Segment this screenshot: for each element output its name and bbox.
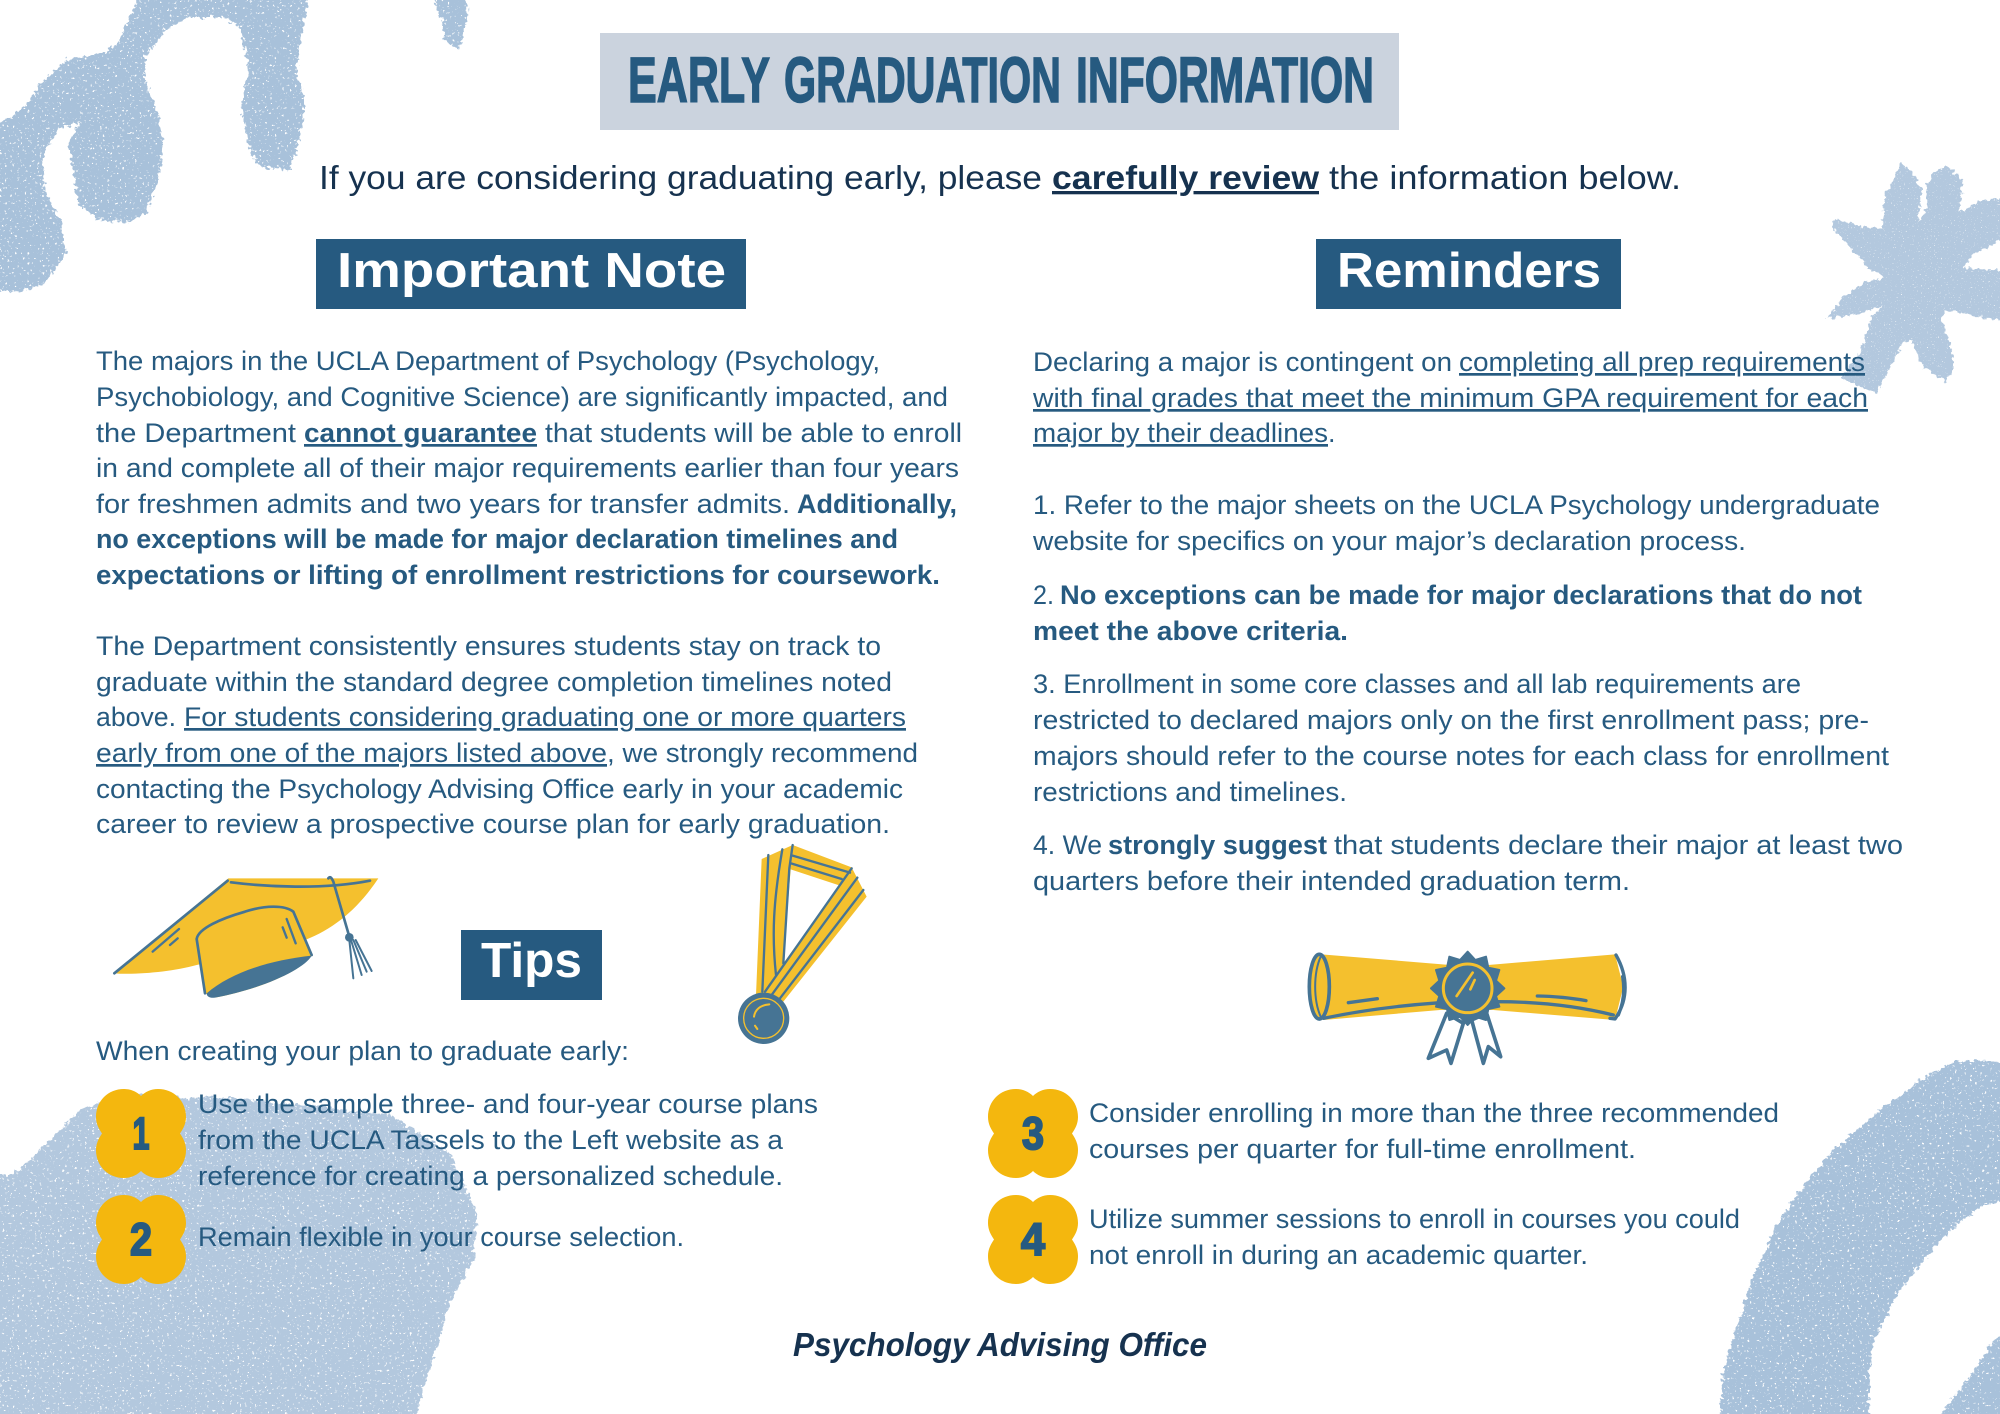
text: step 1: Use the sample three- and four-year course plans [198,1089,818,1119]
badge: step 3 [988,1089,1078,1178]
heading: Tips [461,930,602,1000]
text block: important note paragraph 2: early from one of the majors listed above [96,738,607,768]
text: tips intro: When creating your plan to graduate early: [96,1036,629,1066]
text block: reminder 2: No exceptions can be made for major declarations that do not [1060,580,1862,610]
badge: step 1: 1 [132,1108,150,1159]
heading: Important Note: Important Note [337,244,726,298]
text block: important note paragraph 2: For students considering graduating one or more quarters [184,702,906,732]
text block: reminder 3: 3. Enrollment in some core classes and all lab requirements are [1033,669,1801,699]
intro sentence [319,159,1681,196]
text: step 1: from the UCLA Tassels to the Left website as a [198,1125,784,1155]
text block: important note paragraph 1: the Department [96,418,297,448]
badge: step 1 [96,1089,186,1178]
text block: important note paragraph 1: in and complete all of their major requirements earlier than four years [96,453,959,483]
intro sentence: If you are considering graduating early, please [319,159,1042,196]
heading: Important Note [316,239,746,309]
heading: Reminders: Reminders [1337,244,1601,298]
text: step 3 [1089,1098,1779,1164]
icon: graduation cap [113,877,378,998]
text block: reminder 3 [1033,669,1890,807]
badge: step 2: 2 [130,1214,152,1265]
heading: Tips: Tips [481,934,582,988]
text block: reminder 1 [1032,490,1880,556]
heading: Reminders [1316,239,1621,309]
text block: important note paragraph 1 [96,346,962,590]
text block: reminder 3: majors should refer to the course notes for each class for enrollment [1033,741,1890,771]
badge: step 4 [988,1195,1078,1284]
intro sentence: the information below. [1329,159,1681,196]
text block: reminder 3: restricted to declared majors only on the first enrollment pass; pre- [1033,705,1869,735]
text block: reminders declaration note: . [1328,418,1336,448]
badge: step 3: 3 [1022,1108,1044,1159]
text block: important note paragraph 2: career to review a prospective course plan for early graduation. [96,809,890,839]
badge: step 2 [96,1195,186,1284]
icon: medal [738,845,867,1044]
text block: important note paragraph 1: Psychobiology, and Cognitive Science) are significantly impacted, and [96,382,948,412]
text: step 4: not enroll in during an academic quarter. [1089,1240,1588,1270]
text: step 4: Utilize summer sessions to enroll in courses you could [1089,1204,1740,1234]
text block: important note paragraph 2: , we strongly recommend [607,738,918,768]
title banner: EARLY [628,44,770,116]
text: step 1 [198,1089,818,1191]
text block: important note paragraph 1: that students will be able to enroll [545,418,962,448]
text block: reminder 2 [1033,580,1862,646]
title banner: INFORMATION [1076,44,1374,116]
text block: important note paragraph 1: cannot guarantee [304,418,537,448]
text: step 4 [1089,1204,1740,1270]
text block: reminders declaration note [1032,347,1868,448]
text block: reminder 4 [1033,830,1903,896]
icon: diploma scroll [1309,952,1625,1063]
decorative brush shape: bottom left [0,1093,477,1414]
text block: reminder 2: 2. [1033,580,1054,610]
text block: reminder 3: restrictions and timelines. [1033,777,1347,807]
text block: reminder 1: website for specifics on your major’s declaration process. [1032,526,1746,556]
text block: reminder 1: 1. Refer to the major sheets on the UCLA Psychology undergraduate [1033,490,1880,520]
text block: important note paragraph 2: contacting the Psychology Advising Office early in your academic [96,774,903,804]
text block: important note paragraph 2: graduate within the standard degree completion timelines noted [96,667,892,697]
text block: reminders declaration note: with final grades that meet the minimum GPA requirement for each [1032,383,1868,413]
text block: reminder 4: 4. We [1033,830,1102,860]
text block: important note paragraph 2 [96,631,918,839]
text: step 3: courses per quarter for full-time enrollment. [1089,1134,1636,1164]
text block: reminders declaration note: completing all prep requirements [1459,347,1865,377]
text: step 1: reference for creating a personalized schedule. [198,1161,783,1191]
text block: reminders declaration note: major by their deadlines [1033,418,1328,448]
text block: important note paragraph 1: no exceptions will be made for major declaration timelines and [96,524,898,554]
title banner [600,33,1399,130]
intro sentence: carefully review [1052,159,1319,196]
text block: reminders declaration note: Declaring a major is contingent on [1033,347,1452,377]
text block: reminder 2: meet the above criteria. [1033,616,1348,646]
text block: important note paragraph 1: expectations or lifting of enrollment restrictions for coursework. [96,560,940,590]
text block: important note paragraph 1: The majors in the UCLA Department of Psychology (Psychology, [96,346,880,376]
text block: important note paragraph 2: above. [96,702,176,732]
text block: reminder 4: strongly suggest [1108,830,1327,860]
text block: important note paragraph 1: Additionally, [797,489,957,519]
text block: reminder 4: quarters before their intended graduation term. [1033,866,1630,896]
text block: important note paragraph 1: for freshmen admits and two years for transfer admits. [96,489,790,519]
text: step 2: Remain flexible in your course selection. [198,1222,684,1252]
text block: reminder 4: that students declare their major at least two [1334,830,1903,860]
decorative brush shape: top right star [1827,163,2000,393]
title banner: GRADUATION [784,44,1061,116]
decorative brush shape: bottom right [1720,1060,2000,1414]
badge: step 4: 4 [1021,1214,1045,1265]
footer: office name: Psychology Advising Office [793,1326,1207,1363]
text block: important note paragraph 2: The Department consistently ensures students stay on track to [96,631,881,661]
text: step 3: Consider enrolling in more than the three recommended [1089,1098,1779,1128]
decorative brush shape: top left [0,0,467,292]
